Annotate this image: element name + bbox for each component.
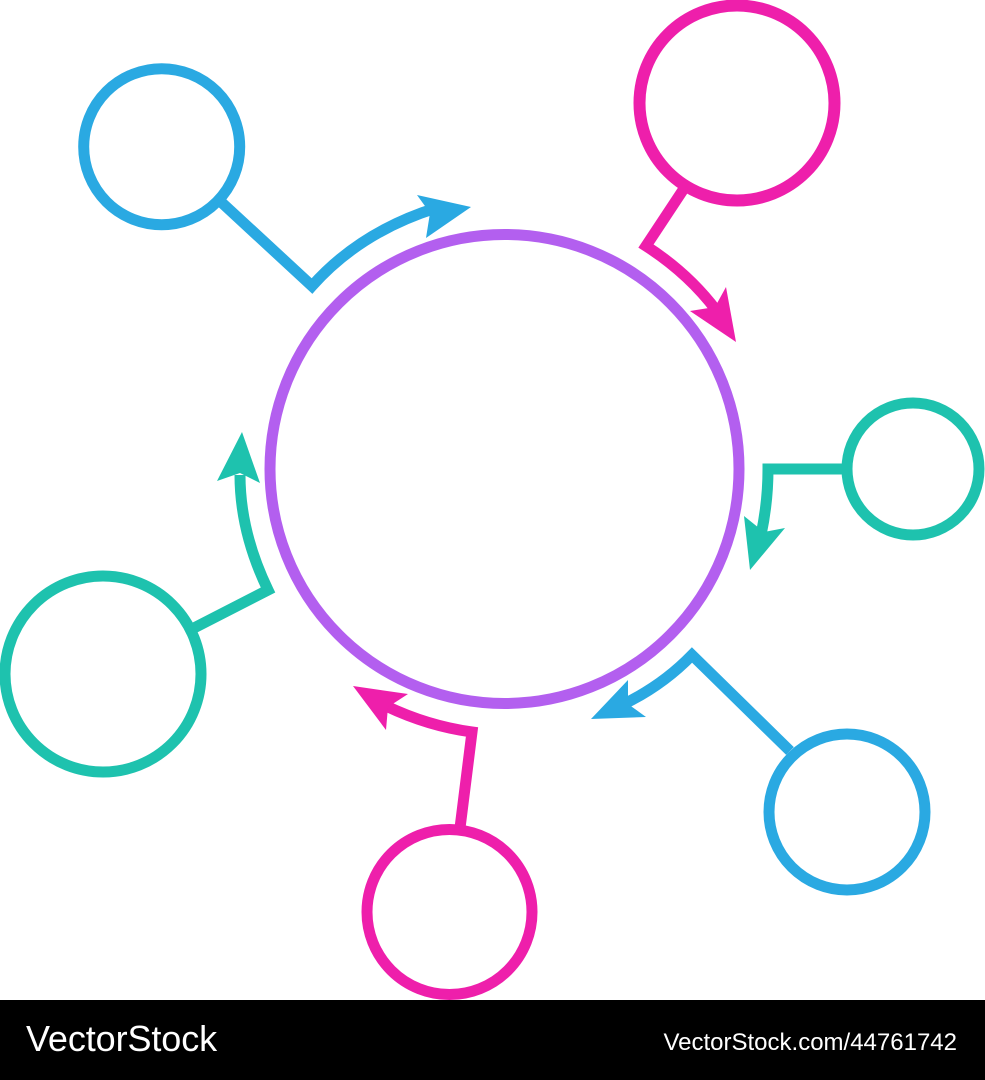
teal circle right bbox=[847, 403, 979, 535]
watermark bar bbox=[0, 1000, 985, 1080]
teal circle left bbox=[5, 576, 201, 772]
image id: VectorStock.com/44761742 bbox=[663, 1029, 957, 1056]
blue circle top left bbox=[84, 69, 240, 225]
pink circle top right bbox=[640, 6, 834, 200]
teal connector and arrow left bbox=[192, 432, 268, 629]
blue connector and arrow top bbox=[220, 195, 471, 286]
teal connector and arrow right bbox=[744, 469, 845, 570]
blue circle bottom right bbox=[769, 734, 925, 890]
pink connector and arrow right bbox=[646, 187, 736, 342]
brand name: VectorStock bbox=[26, 1018, 217, 1059]
central circle bbox=[270, 234, 739, 704]
pink circle bottom bbox=[367, 830, 532, 994]
pink connector and arrow bottom bbox=[353, 686, 472, 828]
blue connector and arrow bottom bbox=[591, 655, 790, 751]
